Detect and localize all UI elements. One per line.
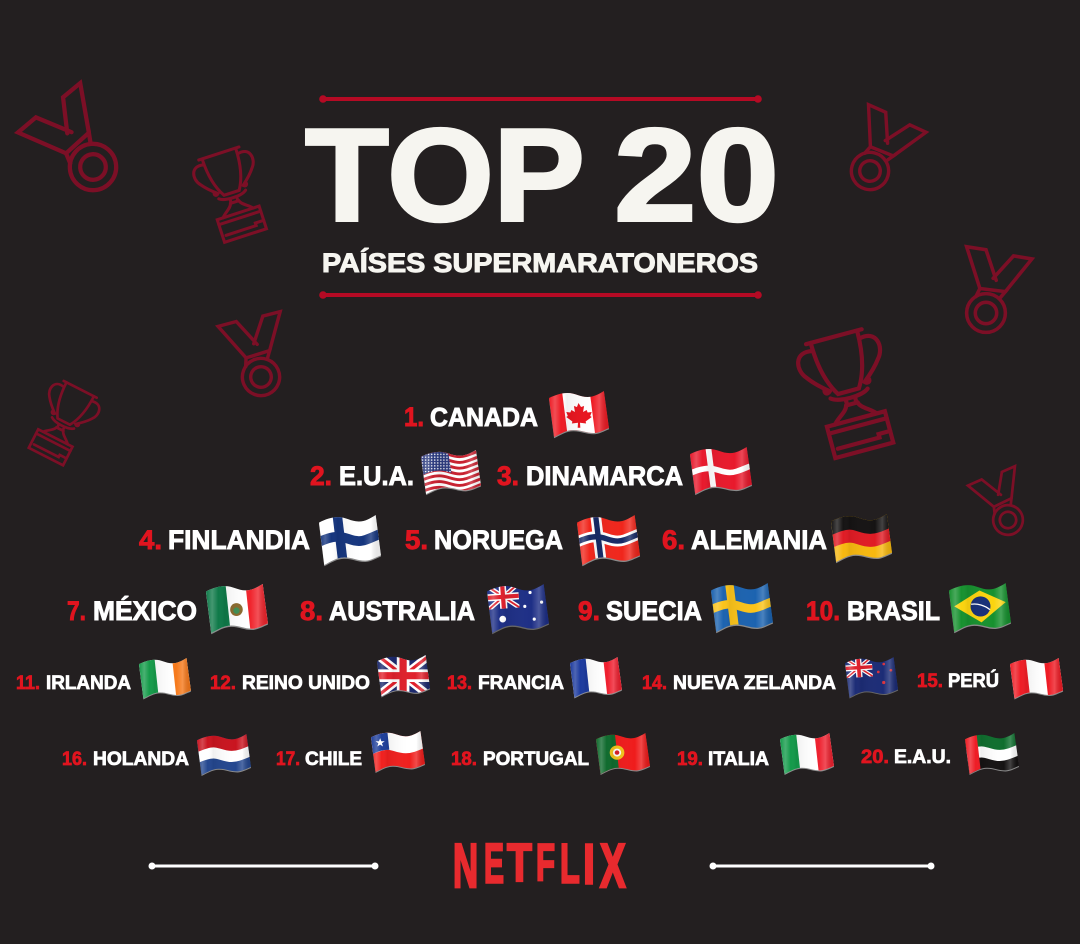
entry: 1 Canada: 1. bbox=[404, 402, 424, 432]
entry: 5 Noruega: 5. bbox=[405, 525, 428, 555]
entry: 2 E.U.A.: E.U.A. bbox=[339, 461, 414, 491]
icon: flag of Finland bbox=[319, 515, 381, 566]
top red rule bbox=[319, 95, 762, 103]
entry: 9 Suecia bbox=[578, 583, 773, 634]
logo: Netflix: E bbox=[484, 833, 504, 895]
entry: 4 Finlandia: 4. bbox=[139, 525, 162, 555]
entry: 13 Francia bbox=[448, 657, 622, 698]
entry: 14 Nueva Zelanda bbox=[642, 657, 898, 698]
entry: 8 Australia: 8. bbox=[300, 596, 323, 626]
icon: flag of New Zealand bbox=[845, 657, 898, 698]
logo: Netflix: F bbox=[536, 834, 555, 892]
entry: 5 Noruega: NORUEGA bbox=[434, 525, 563, 555]
entry: 17 Chile: 17. bbox=[276, 749, 300, 770]
icon: flag of the Netherlands bbox=[197, 734, 251, 776]
entry: 3 Dinamarca: 3. bbox=[497, 461, 519, 491]
icon: large trophy right bbox=[793, 326, 905, 461]
entry: 7 México: MÉXICO bbox=[93, 595, 197, 626]
entry: 3 Dinamarca bbox=[497, 447, 752, 495]
icon: trophy top left bbox=[190, 144, 275, 245]
icon: flag of Mexico bbox=[206, 584, 268, 634]
entry: 7 México bbox=[68, 584, 268, 634]
entry: 11 Irlanda: IRLANDA bbox=[46, 673, 131, 694]
icon: small medal right bbox=[968, 458, 1046, 541]
title: TOP bbox=[305, 101, 585, 249]
entry: 12 Reino Unido: REINO UNIDO bbox=[242, 673, 370, 694]
entry: 20 E.A.U.: E.A.U. bbox=[894, 747, 951, 768]
entry: 8 Australia: AUSTRALIA bbox=[329, 596, 475, 626]
entry: 19 Italia: 19. bbox=[677, 749, 703, 770]
icon: flag of the United States bbox=[421, 450, 481, 495]
entry: 4 Finlandia bbox=[138, 515, 381, 566]
icon: flag of Canada bbox=[549, 391, 609, 438]
entry: 12 Reino Unido: 12. bbox=[210, 673, 236, 694]
entry: 11 Irlanda: 11. bbox=[16, 673, 40, 694]
entry: 17 Chile bbox=[276, 731, 425, 773]
icon: medal top left bbox=[18, 74, 147, 200]
icon: trophy left bbox=[22, 377, 104, 469]
entry: 14 Nueva Zelanda: NUEVA ZELANDA bbox=[673, 673, 836, 694]
entry: 14 Nueva Zelanda: 14. bbox=[642, 673, 667, 694]
icon: medal center left bbox=[218, 301, 309, 402]
bottom red rule bbox=[319, 291, 762, 299]
entry: 10 Brasil: 10. bbox=[806, 596, 840, 626]
entry: 17 Chile: CHILE bbox=[305, 749, 362, 770]
icon: flag of Portugal bbox=[596, 733, 650, 775]
footer line left bbox=[148, 862, 378, 870]
entry: 6 Alemania: ALEMANIA bbox=[691, 525, 827, 555]
entry: 16 Holanda: HOLANDA bbox=[93, 749, 189, 770]
entry: 15 Perú: PERÚ bbox=[948, 670, 999, 692]
entry: 18 Portugal: PORTUGAL bbox=[483, 749, 589, 770]
entry: 11 Irlanda bbox=[16, 658, 191, 700]
icon: flag of Germany bbox=[831, 514, 892, 564]
footer line right bbox=[710, 862, 934, 870]
entry: 10 Brasil: BRASIL bbox=[847, 596, 940, 626]
icon: flag of Brazil bbox=[949, 583, 1011, 634]
entry: 9 Suecia: 9. bbox=[578, 596, 600, 626]
icon: medal top right bbox=[847, 105, 929, 200]
entry: 15 Perú bbox=[918, 658, 1064, 700]
entry: 18 Portugal bbox=[452, 733, 650, 775]
logo: Netflix: I bbox=[583, 832, 595, 896]
entry: 4 Finlandia: FINLANDIA bbox=[168, 525, 310, 555]
entry: 10 Brasil bbox=[807, 583, 1011, 634]
entry: 1 Canada: CANADA bbox=[430, 404, 538, 432]
entry: 20 E.A.U. bbox=[861, 733, 1019, 775]
entry: 20 E.A.U.: 20. bbox=[861, 747, 889, 768]
icon: flag of Peru bbox=[1010, 658, 1064, 700]
logo: Netflix bbox=[453, 831, 626, 901]
logo: Netflix: X bbox=[600, 831, 626, 900]
icon: flag of Ireland bbox=[139, 658, 191, 700]
icon: flag of France bbox=[570, 657, 622, 698]
entry: 19 Italia: ITALIA bbox=[708, 749, 769, 770]
entry: 2 E.U.A. bbox=[310, 450, 481, 495]
logo: Netflix: L bbox=[560, 832, 580, 895]
icon: medal right bbox=[967, 247, 1032, 332]
entry: 13 Francia: FRANCIA bbox=[478, 673, 564, 694]
entry: 5 Noruega bbox=[405, 515, 640, 566]
entry: 16 Holanda bbox=[62, 734, 251, 776]
subtitle: PAÍSES SUPERMARATONEROS bbox=[322, 247, 758, 278]
entry: 6 Alemania: 6. bbox=[662, 525, 685, 555]
icon: flag of Australia bbox=[487, 584, 549, 634]
entry: 15 Perú: 15. bbox=[917, 671, 943, 692]
icon: flag of the United Kingdom bbox=[377, 655, 430, 698]
entry: 6 Alemania bbox=[662, 514, 892, 564]
entry: 8 Australia bbox=[300, 584, 549, 634]
entry: 7 México: 7. bbox=[67, 596, 86, 626]
icon: flag of Sweden bbox=[711, 583, 773, 634]
entry: 18 Portugal: 18. bbox=[451, 749, 477, 770]
entry: 2 E.U.A.: 2. bbox=[310, 461, 332, 491]
entry: 19 Italia bbox=[678, 733, 834, 775]
title: 20 bbox=[614, 102, 779, 248]
entry: 1 Canada bbox=[405, 391, 609, 438]
entry: 16 Holanda: 16. bbox=[62, 749, 87, 770]
entry: 9 Suecia: SUECIA bbox=[606, 596, 702, 626]
entry: 12 Reino Unido bbox=[210, 655, 430, 698]
entry: 13 Francia: 13. bbox=[447, 673, 472, 694]
icon: flag of the United Arab Emirates bbox=[965, 733, 1019, 775]
entry: 3 Dinamarca: DINAMARCA bbox=[526, 461, 683, 491]
icon: flag of Italy bbox=[780, 733, 834, 775]
icon: flag of Norway bbox=[577, 515, 640, 566]
icon: flag of Denmark bbox=[690, 447, 752, 495]
title bbox=[305, 101, 779, 249]
icon: flag of Chile bbox=[371, 731, 425, 773]
logo: Netflix: T bbox=[507, 834, 532, 893]
logo: Netflix: N bbox=[453, 832, 478, 901]
